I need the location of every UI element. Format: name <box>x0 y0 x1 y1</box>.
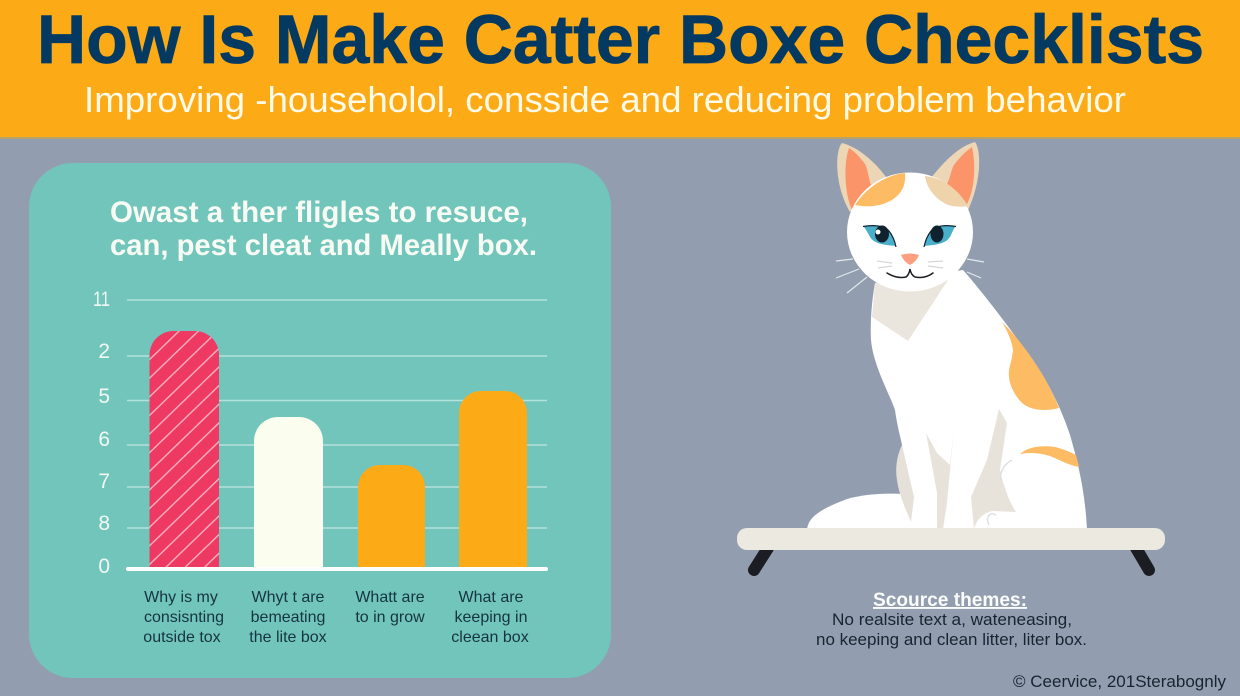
category labels: Whyt t are <box>252 589 325 606</box>
category labels: outside tox <box>143 629 221 646</box>
category labels: Why is my <box>144 589 218 606</box>
orange stripe <box>1020 446 1079 467</box>
platform legs <box>754 548 1149 570</box>
note body: no keeping and clean litter, liter box. <box>816 631 1087 649</box>
right eye <box>924 226 956 247</box>
y axis labels: 8 <box>98 512 110 535</box>
cat tail <box>807 494 925 530</box>
baseline <box>126 567 548 571</box>
y axis labels: 7 <box>98 470 110 493</box>
y axis labels: 0 <box>98 555 110 578</box>
bar chart <box>93 288 548 646</box>
bar: orange short <box>358 465 425 568</box>
left ear <box>837 143 886 212</box>
y axis labels: 11 <box>93 288 110 311</box>
category labels: Whatt are <box>355 589 425 606</box>
cat on platform illustration <box>737 142 1165 570</box>
leg shading <box>896 445 914 522</box>
cat body <box>871 270 1087 530</box>
category labels <box>143 589 529 646</box>
bar: cream <box>254 417 323 568</box>
y axis labels: 5 <box>98 385 110 408</box>
head patch orange <box>855 173 905 206</box>
category labels: bemeating <box>251 609 325 626</box>
note heading: Scource themes: <box>873 590 1027 611</box>
category labels: consisnting <box>144 609 224 626</box>
right ear <box>931 142 979 210</box>
chest shading <box>872 280 948 341</box>
whiskers <box>836 259 984 293</box>
nose <box>901 254 919 265</box>
bar: hatched red <box>150 331 219 568</box>
category labels: the lite box <box>249 629 327 646</box>
category labels: What are <box>459 589 524 606</box>
panel heading <box>110 196 537 262</box>
category labels: to in grow <box>355 609 425 626</box>
title: How Is Make Catter Boxe Checklists <box>37 1 1204 78</box>
head patch beige <box>925 176 968 207</box>
left eye <box>863 226 896 247</box>
copyright: © Ceervice, 201Sterabognly <box>1013 672 1226 691</box>
haunch line <box>988 460 1012 525</box>
platform top <box>737 528 1165 550</box>
note body: No realsite text a, wateneasing, <box>832 611 1072 629</box>
bar: orange tall <box>459 391 527 568</box>
y axis labels: 2 <box>98 340 110 363</box>
panel: bar chart card <box>29 163 611 678</box>
mouth <box>887 269 933 278</box>
panel heading: Owast a ther fligles to resuce, <box>110 196 528 229</box>
cat head <box>847 172 973 292</box>
orange back patch <box>1002 322 1059 410</box>
note body <box>816 611 1087 649</box>
category labels: keeping in <box>455 609 527 626</box>
panel heading: can, pest cleat and Meally box. <box>110 229 537 262</box>
category labels: cleean box <box>451 629 529 646</box>
header banner <box>0 0 1240 139</box>
subtitle: Improving -householol, consside and reducing problem behavior <box>84 79 1126 120</box>
source themes note <box>816 590 1087 649</box>
y axis labels <box>93 288 110 578</box>
y axis labels: 6 <box>98 428 110 451</box>
